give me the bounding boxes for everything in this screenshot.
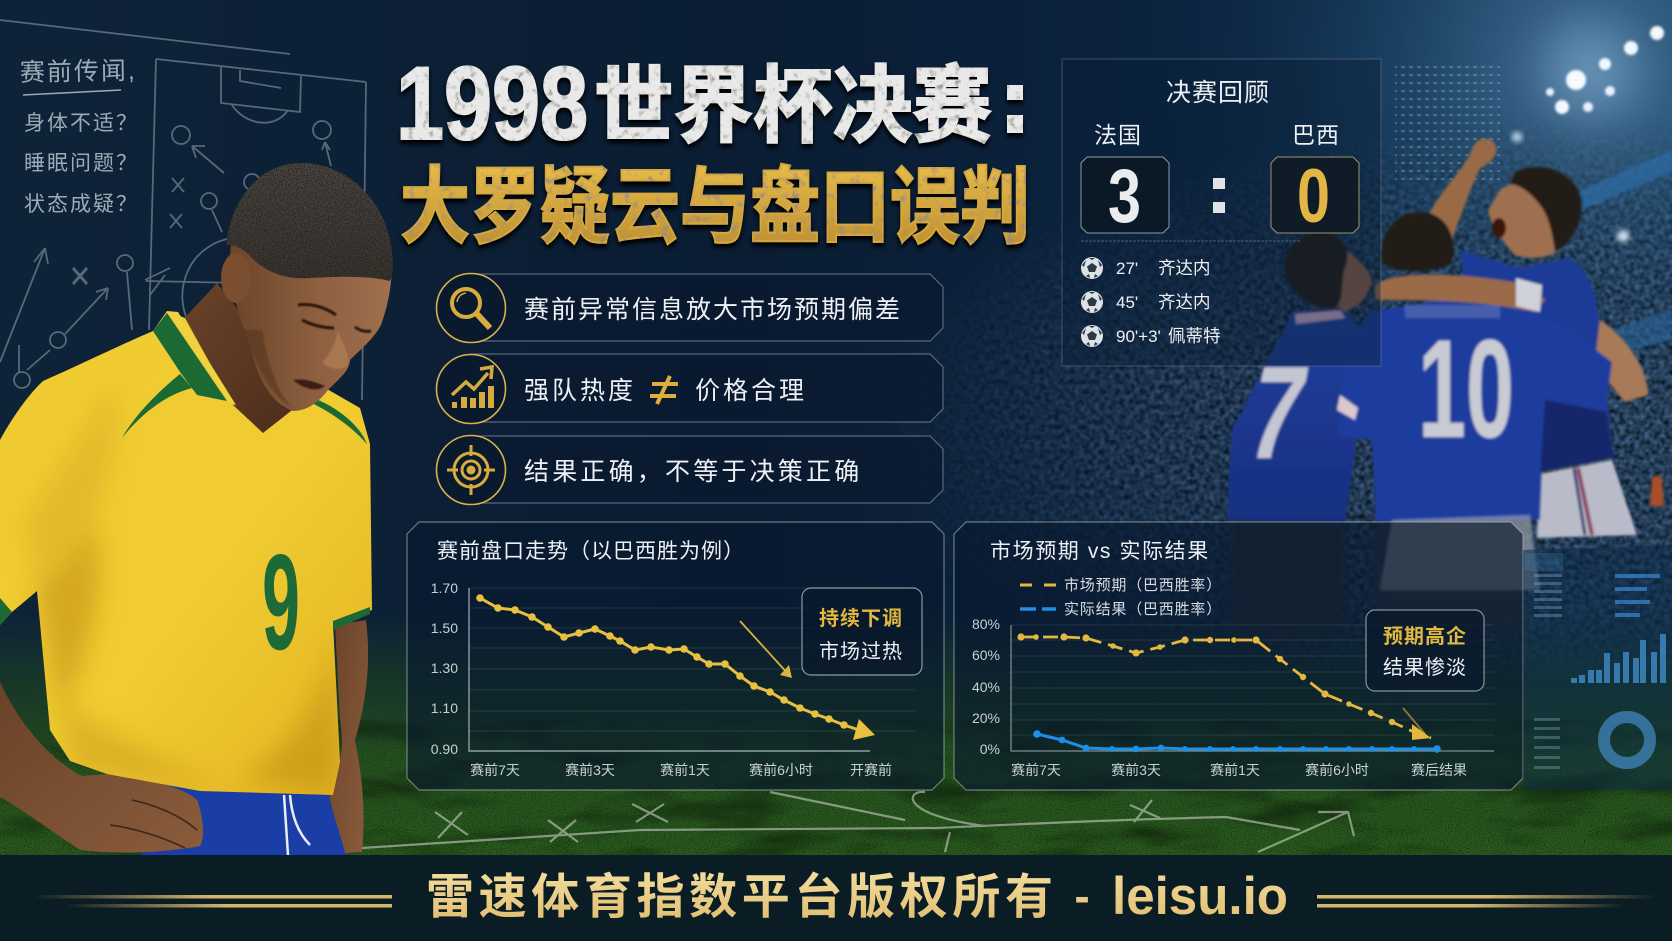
- player legs: [1232, 510, 1525, 635]
- jersey body: [0, 311, 372, 795]
- x axis labels: 赛前3天: [1111, 762, 1161, 778]
- score box France: 3: [1108, 154, 1141, 239]
- legend: [1020, 577, 1222, 618]
- panel: key point 3: 结果正确，不等于决策正确: [524, 458, 862, 486]
- y axis labels: 40%: [972, 679, 1000, 695]
- copyright text: 雷速体育指数平台版权所有: [426, 871, 1053, 924]
- goal list: 齐达内: [1158, 292, 1210, 312]
- dashboard donut: [1604, 717, 1650, 763]
- right decorative rules: [1317, 895, 1657, 908]
- panel: key point 3: [436, 436, 943, 504]
- y axis labels: 0%: [980, 741, 1000, 757]
- goal list: 45': [1116, 293, 1138, 312]
- dashboard text rows: [1534, 574, 1562, 769]
- x axis labels: 开赛前: [850, 762, 892, 778]
- score separator: [1213, 178, 1225, 213]
- panel: key point 1: 赛前异常信息放大市场预期偏差: [524, 296, 902, 324]
- raised arm: [1430, 139, 1496, 240]
- y axis labels: 0.90: [431, 741, 458, 757]
- callout: high expectation: 预期高企: [1383, 624, 1467, 648]
- player 7: [1227, 232, 1372, 522]
- y axis labels: 20%: [972, 710, 1000, 726]
- right forearm: [328, 620, 368, 853]
- chart grid and axes: [469, 588, 915, 751]
- legend: 实际结果（巴西胜率）: [1064, 601, 1222, 618]
- panel: key point 2: 价格合理: [695, 377, 807, 405]
- French players celebrating: [1227, 139, 1648, 635]
- y axis labels: 1.70: [431, 580, 458, 596]
- player right head: [1488, 167, 1582, 258]
- facial features: [245, 304, 371, 408]
- score box Brazil: [1271, 154, 1359, 239]
- y axis labels: 1.50: [431, 620, 458, 636]
- actual result line: [1033, 730, 1441, 753]
- title line 2: 大罗疑云与盘口误判: [400, 160, 1030, 254]
- x axis labels: 赛前3天: [565, 762, 615, 778]
- chalkboard rumors note: [20, 57, 139, 216]
- chalkboard rumors note: 状态成疑？: [24, 193, 139, 216]
- x axis labels: [1011, 762, 1467, 778]
- y axis labels: 80%: [972, 616, 1000, 632]
- neck: [178, 283, 310, 436]
- x axis labels: [470, 762, 892, 778]
- icon: rising chart: [452, 367, 494, 408]
- x axis labels: 赛前7天: [470, 762, 520, 778]
- shorts: [105, 772, 347, 855]
- player 7: 7: [1239, 339, 1317, 486]
- icon: magnifier: [452, 289, 490, 328]
- icon: target: [447, 445, 495, 495]
- chart grid and axes: [1011, 625, 1494, 751]
- goal list: 27': [1116, 259, 1138, 278]
- chalkboard rumors note: 身体不适？: [24, 112, 139, 135]
- y axis labels: 1.30: [431, 660, 458, 676]
- team names: 巴西: [1292, 122, 1340, 148]
- x axis labels: 赛后结果: [1411, 762, 1467, 778]
- player right shirt and shorts: [1460, 250, 1614, 472]
- y axis labels: 60%: [972, 647, 1000, 663]
- chalkboard tactics sketch: [0, 20, 366, 400]
- chalkboard rumors note: 睡眠问题？: [24, 152, 139, 175]
- collar and green trim: [0, 311, 370, 630]
- footer banner: [0, 855, 1672, 941]
- player 10: 10: [1418, 310, 1514, 467]
- chart heading: 市场预期 vs 实际结果: [990, 540, 1210, 563]
- jersey fold shading: [25, 385, 340, 795]
- score box France: [1081, 154, 1169, 239]
- copyright text: [426, 867, 1288, 926]
- callout: falling odds: 持续下调: [819, 607, 903, 630]
- data dashboard decoration: [1523, 545, 1672, 790]
- jersey number: 9: [262, 526, 300, 678]
- scoreboard heading: 决赛回顾: [1166, 79, 1270, 107]
- title line 1: 1998: [396, 46, 588, 162]
- panel: key point 2: 强队热度: [524, 377, 636, 405]
- pitch chalk markings: [362, 792, 1354, 852]
- head and face: [221, 163, 393, 411]
- y axis labels: [972, 616, 1000, 757]
- stadium floodlights: [1512, 22, 1664, 242]
- team names: [1094, 122, 1340, 148]
- panel: pre-match odds trend chart: [407, 522, 944, 790]
- goal list: 佩蒂特: [1168, 326, 1220, 346]
- x axis labels: 赛前7天: [1011, 762, 1061, 778]
- goal list: 90'+3': [1116, 327, 1161, 346]
- x axis labels: 赛前6小时: [749, 762, 813, 778]
- title line 1: [396, 46, 1023, 162]
- callout: falling odds: 市场过热: [819, 640, 903, 663]
- player right arm behind: [1595, 320, 1648, 402]
- callout: falling odds: [802, 588, 922, 675]
- copyright text: -: [1074, 870, 1090, 922]
- team names: 法国: [1094, 122, 1142, 148]
- dashboard horizontal bars: [1615, 574, 1660, 617]
- chart heading: 赛前盘口走势（以巴西胜为例）: [437, 540, 745, 563]
- callout: high expectation: 结果惨淡: [1383, 656, 1467, 679]
- player 10: [1337, 212, 1614, 590]
- goal list: 齐达内: [1158, 258, 1210, 278]
- panel: final recap scoreboard: [1062, 59, 1381, 366]
- callout: high expectation: [1366, 610, 1484, 691]
- panel: key point 2: [436, 354, 943, 424]
- player: Ronaldo in yellow jersey: [0, 163, 393, 855]
- goal list: [1081, 257, 1220, 347]
- panel: key point 1: [436, 274, 943, 342]
- title: [396, 46, 1030, 254]
- x axis labels: 赛前6小时: [1305, 762, 1369, 778]
- copyright text: leisu.io: [1112, 867, 1288, 926]
- left arm and hand: [0, 682, 203, 853]
- panel: market expectation vs actual chart: [954, 522, 1523, 790]
- legend: 市场预期（巴西胜率）: [1064, 577, 1222, 594]
- left decorative rules: [32, 895, 392, 908]
- dashboard bar chart: [1571, 634, 1666, 683]
- x axis labels: 赛前1天: [660, 762, 710, 778]
- x axis labels: 赛前1天: [1210, 762, 1260, 778]
- dot matrix data decoration: [1395, 60, 1500, 182]
- not-equal sign: [650, 376, 678, 404]
- shorts drawstrings: [284, 795, 310, 855]
- odds line: [476, 594, 875, 740]
- y axis labels: 1.10: [431, 700, 458, 716]
- score box Brazil: 0: [1297, 154, 1330, 239]
- arrow: downward trend: [740, 621, 792, 678]
- title line 1: 世界杯决赛: [594, 59, 992, 153]
- chalkboard rumors note: 赛前传闻,: [20, 57, 137, 87]
- market expectation line: [1017, 633, 1431, 740]
- y axis labels: [431, 580, 458, 757]
